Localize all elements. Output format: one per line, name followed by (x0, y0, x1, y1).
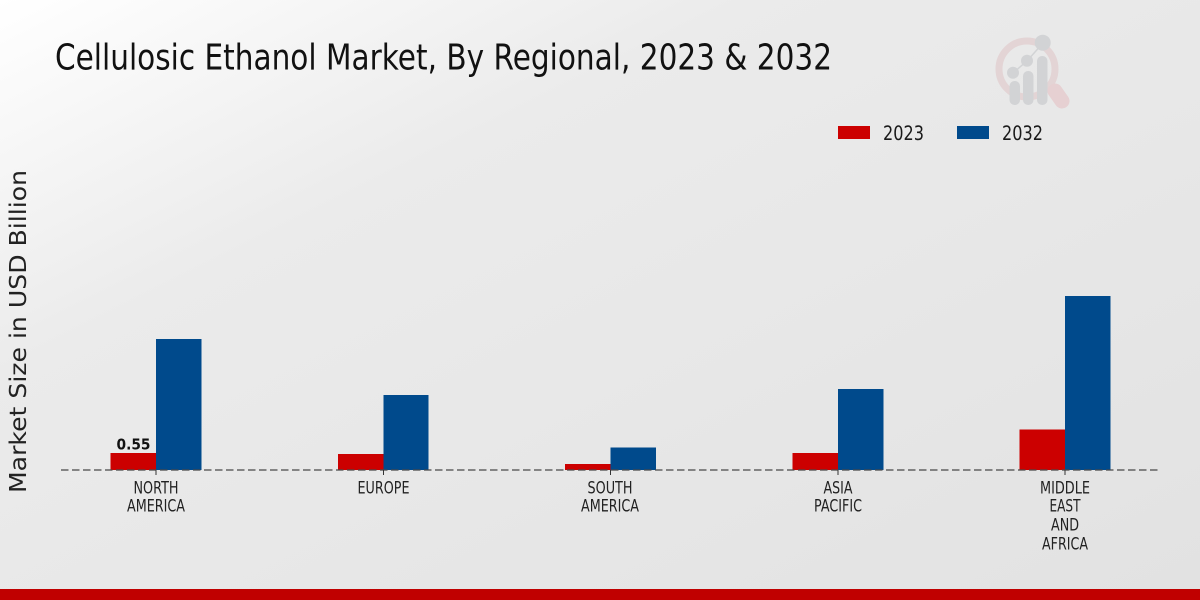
x axis labels (127, 478, 1090, 554)
data label: 0.55 (116, 436, 150, 454)
legend (838, 122, 1043, 145)
legend item: 2032 (957, 122, 1043, 145)
legend item: 2032: 2032 (1002, 122, 1043, 145)
label: Asia Pacific: PACIFIC (814, 496, 862, 516)
label: Middle East and Africa: EAST (1050, 496, 1081, 516)
bars: Europe (338, 395, 428, 470)
label: South America: AMERICA (581, 496, 640, 516)
label: South America: SOUTH (588, 478, 632, 498)
legend item: 2023: 2023 (883, 122, 924, 145)
y axis title: Market Size in USD Billion (4, 170, 32, 493)
bars: South America (565, 448, 656, 470)
bars: North America (110, 339, 202, 470)
label: Middle East and Africa: AFRICA (1042, 534, 1089, 554)
label: North America: AMERICA (127, 496, 186, 516)
label: Europe: EUROPE (358, 478, 410, 498)
label: Middle East and Africa: AND (1051, 516, 1079, 534)
legend item: 2023 (838, 122, 924, 145)
label: Middle East and Africa: MIDDLE (1040, 478, 1090, 498)
bars: Asia Pacific (792, 389, 884, 470)
label: North America: NORTH (134, 478, 178, 498)
bar chart (61, 296, 1159, 475)
icon: magnifier logo watermark (999, 35, 1062, 105)
title: Cellulosic Ethanol Market, By Regional, 2023 & 2032 (55, 38, 832, 78)
bottom accent bar (0, 589, 1200, 600)
bars: Middle East and Africa (1020, 296, 1110, 470)
label: Asia Pacific: ASIA (824, 478, 853, 498)
